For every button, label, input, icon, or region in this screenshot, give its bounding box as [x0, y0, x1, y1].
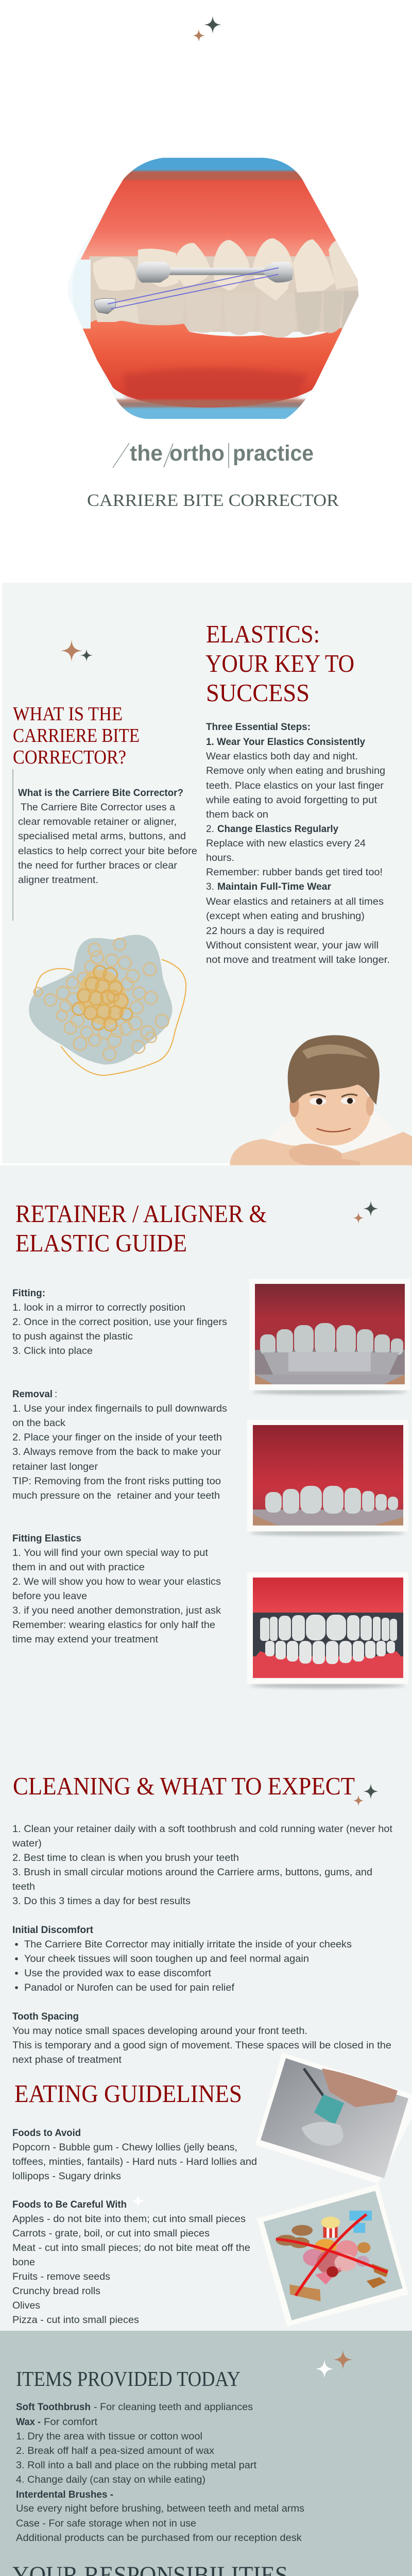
text block: cleaning steps: teeth [12, 1882, 35, 1892]
text block: three essential steps: Replace with new elastics every 24 [206, 838, 366, 849]
panel: what is the carriere bite corrector [12, 620, 412, 1165]
text block: removal: 3. Always remove from the back to make your [12, 1447, 221, 1458]
panel: retainer aligner and elastic guide [12, 1199, 410, 1688]
heading: elastics your key to success: SUCCESS [206, 679, 310, 707]
text block: removal: much pressure on the retainer and your teeth [12, 1490, 220, 1501]
logo: the/ortho|practice: practice [233, 441, 314, 466]
text block: foods to avoid: lollipops - Sugary drinks [12, 2171, 121, 2182]
hero panel [66, 16, 363, 510]
panel background: items and responsibilities [0, 2331, 412, 2576]
text block: cleaning steps: 3. Brush in small circular motions around the Carriere arms, buttons, gums, and [12, 1867, 372, 1878]
text block: initial discomfort [12, 1925, 352, 1993]
text block: foods to avoid: Popcorn - Bubble gum - Chewy lollies (jelly beans, [12, 2142, 237, 2153]
text block: fitting elastics: 3. if you need another demonstration, just ask [12, 1605, 221, 1616]
text block: three essential steps: 22 hours a day is required [206, 926, 324, 937]
text block: removal: TIP: Removing from the front risks putting too [12, 1476, 221, 1487]
text block: items list: Case - For safe storage when not in use [16, 2518, 196, 2529]
heading: elastics your key to success: YOUR KEY TO [205, 649, 354, 677]
text block: cleaning steps: 1. Clean your retainer daily with a soft toothbrush and cold running water (never hot [12, 1824, 393, 1835]
text block: tooth spacing [12, 2011, 391, 2065]
heading: what is: CORRECTOR? [13, 747, 126, 768]
text block: three essential steps: Remove only when eating and brushing [206, 766, 385, 776]
heading: retainer guide: ELASTIC GUIDE [15, 1229, 187, 1257]
icon: faint white star [131, 1611, 145, 1625]
text block: three essential steps: not move and treatment will take longer. [206, 955, 390, 965]
heading: what is: WHAT IS THE [13, 703, 123, 725]
text block: three essential steps: while eating to avoid forgetting to put [205, 795, 377, 806]
heading: eating guidelines: EATING GUIDELINES [14, 2079, 242, 2108]
text block: three essential steps: 2. [206, 824, 214, 835]
logo: the/ortho|practice: ortho [169, 441, 225, 466]
text block: items list: Additional products can be purchased from our reception desk [16, 2533, 302, 2544]
text block: definition: clear removable retainer or aligner, [18, 817, 177, 827]
text block: tooth spacing: You may notice small spaces developing around your front teeth. [12, 2026, 307, 2037]
text block: items list: For comfort [44, 2417, 98, 2428]
illustration: teeth with bite corrector [66, 155, 363, 424]
text block: initial discomfort: Panadol or Nurofen can be used for pain relief [24, 1982, 235, 1993]
text block: cleaning steps: 2. Best time to clean is when you brush your teeth [12, 1853, 239, 1863]
photo: removal [247, 1420, 408, 1536]
photo: fitting elastics [247, 1572, 408, 1688]
text block: foods to be careful with: Olives [12, 2300, 40, 2311]
text block: fitting elastics: before you leave [12, 1591, 87, 1602]
icon: faint white star [131, 2194, 145, 2208]
text block: items list: - For cleaning teeth and appliances [94, 2402, 253, 2413]
heading: items provided today: ITEMS PROVIDED TODAY [16, 2367, 241, 2391]
text block: initial discomfort: The Carriere Bite Corrector may initially irritate the inside of your cheeks [24, 1939, 352, 1950]
text block: foods to be careful with: Crunchy bread rolls [12, 2286, 100, 2297]
text block: foods to avoid: toffees, minties, fantails) - Hard nuts - Hard lollies and [12, 2157, 257, 2167]
text block: tooth spacing: Tooth Spacing [12, 2011, 79, 2022]
text block: fitting: 1. look in a mirror to correctly position [12, 1302, 185, 1313]
text block: cleaning steps: water) [12, 1838, 42, 1849]
heading: what is: CARRIERE BITE [13, 725, 140, 747]
text block: three essential steps: hours. [206, 853, 234, 863]
text block: initial discomfort: Initial Discomfort [12, 1925, 94, 1936]
text block: fitting [12, 1288, 227, 1357]
text block: removal: : [55, 1389, 57, 1400]
text block: foods to be careful with: bone [12, 2257, 35, 2268]
heading: elastics your key to success: ELASTICS: [206, 620, 320, 648]
heading: retainer guide [15, 1199, 267, 1257]
text block: fitting elastics: them in and out with practice [12, 1562, 145, 1573]
text block: items list: Interdental Brushes - [16, 2489, 113, 2500]
text block: removal: 1. Use your index fingernails to pull downwards [12, 1403, 227, 1414]
icon: sparkle stars [61, 640, 93, 662]
text block: tooth spacing: next phase of treatment [12, 2055, 122, 2065]
rule [12, 769, 13, 921]
text block: foods to be careful with [12, 2199, 250, 2326]
text block: three essential steps [205, 722, 390, 965]
text block: items list: 1. Dry the area with tissue or cotton wool [16, 2431, 202, 2442]
text block: fitting: Fitting: [12, 1288, 45, 1299]
text block: three essential steps: teeth. Place elastics on your last finger [206, 781, 384, 791]
text block: three essential steps: them back on [206, 809, 268, 820]
text block: definition: elastics to help correct your bite before [18, 846, 197, 857]
text block: removal: 2. Place your finger on the inside of your teeth [12, 1432, 222, 1443]
text block: three essential steps: 3. [206, 882, 214, 892]
text block: cleaning steps [12, 1824, 393, 1907]
icon: sparkle stars top [193, 16, 221, 42]
text block: items list: Wax - [16, 2417, 41, 2428]
text block: fitting elastics: Remember: wearing elastics for only half the [12, 1620, 215, 1631]
text block: elastics heading and steps [205, 620, 390, 965]
text block: foods to be careful with: Apples - do not bite into them; cut into small pieces [12, 2214, 246, 2225]
heading: cleaning: CLEANING & WHAT TO EXPECT [13, 1772, 355, 1800]
heading: what is [13, 703, 140, 768]
text block: initial discomfort: Your cheek tissues will soon toughen up and feel normal again [24, 1954, 309, 1964]
text block: foods to be careful with: Carrots - grate, boil, or cut into small pieces [12, 2228, 210, 2239]
text block: items list: 2. Break off half a pea-sized amount of wax [16, 2446, 215, 2456]
text block: fitting elastics: time may extend your treatment [12, 1634, 159, 1645]
text block: removal: Removal [12, 1389, 53, 1400]
text block: three essential steps: (except when eating and brushing) [206, 911, 365, 922]
panel background: guides [0, 1165, 412, 2331]
heading: retainer guide: RETAINER / ALIGNER & [15, 1199, 267, 1228]
text block: definition: specialised metal arms, buttons, and [18, 831, 186, 842]
text block: definition: the need for further braces or clear [18, 860, 178, 871]
text block: items list [16, 2402, 304, 2544]
text block: removal: on the back [12, 1418, 66, 1429]
text block: definition: aligner treatment. [18, 875, 98, 886]
elastic [108, 268, 279, 309]
text block: fitting: to push against the plastic [12, 1331, 133, 1342]
text block: fitting elastics [12, 1533, 221, 1645]
panel: cleaning and what to expect [12, 1772, 393, 2065]
text block: foods to be careful with: Meat - cut into small pieces; do not bite meat off the [12, 2243, 250, 2253]
text block: fitting: 3. Click into place [12, 1346, 93, 1357]
metal arm [169, 268, 265, 275]
page background: white hero [0, 0, 412, 583]
text block: foods to avoid [12, 2128, 257, 2182]
text block: three essential steps: Change Elastics Regularly [217, 824, 338, 835]
text block: fitting elastics: 2. We will show you how to wear your elastics [12, 1577, 221, 1587]
icon: sparkle stars [353, 1784, 379, 1806]
text block: definition [18, 788, 197, 886]
photo: fitting aligner [249, 1279, 410, 1395]
logo: the/ortho|practice [113, 441, 314, 468]
panel: eating guidelines [12, 2053, 412, 2327]
panel: items provided today [16, 2350, 353, 2544]
text block: definition: The Carriere Bite Corrector uses a [21, 802, 175, 813]
lower aligner teeth [95, 291, 358, 338]
text block: items list: 4. Change daily (can stay on while eating) [16, 2475, 205, 2485]
text block: three essential steps: Wear elastics both day and night. [206, 751, 358, 762]
text block: three essential steps: Three Essential Steps: [206, 722, 311, 733]
text block: three essential steps: 1. Wear Your Elastics Consistently [206, 737, 365, 748]
text block: removal [12, 1389, 227, 1501]
photo: toothbrush cleaning aligner [255, 2053, 412, 2184]
panel background: what is / elastics [2, 583, 412, 1163]
text block: items list: Use every night before brushing, between teeth and metal arms [16, 2503, 304, 2514]
text block: removal: retainer last longer [12, 1462, 98, 1472]
heading: elastics your key to success [205, 620, 354, 707]
text block: foods to avoid: Foods to Avoid [12, 2128, 81, 2139]
text block: items list: Soft Toothbrush [16, 2402, 91, 2413]
text block: foods to be careful with: Fruits - remove seeds [12, 2272, 110, 2282]
text block: tooth spacing: This is temporary and a good sign of movement. These spaces will be closed in the [12, 2040, 391, 2051]
upper teeth [93, 238, 358, 301]
text block: initial discomfort: Use the provided wax to ease discomfort [24, 1968, 212, 1979]
text block: fitting: 2. Once in the correct position, use your fingers [12, 1317, 227, 1328]
logo: the/ortho|practice: the [130, 441, 163, 466]
text block: foods to be careful with: Pizza - cut into small pieces [12, 2315, 139, 2326]
text block: three essential steps: Without consistent wear, your jaw will [206, 940, 379, 951]
image: smiling boy [230, 1035, 412, 1165]
text block: three essential steps: Maintain Full-Time Wear [217, 882, 332, 892]
text block: foods to be careful with: Foods to Be Careful With [12, 2199, 127, 2210]
text block: three essential steps: Remember: rubber bands get tired too! [206, 867, 383, 878]
text block: fitting elastics: 1. You will find your own special way to put [12, 1548, 209, 1558]
text block: items list: 3. Roll into a ball and place on the rubbing metal part [16, 2460, 257, 2471]
text block: three essential steps: Wear elastics and retainers at all times [206, 896, 384, 907]
text block: definition: What is the Carriere Bite Corrector? [18, 788, 183, 799]
icon: sparkle stars [315, 2350, 353, 2378]
image: pile of elastics on blob [29, 935, 186, 1075]
text block: fitting elastics: Fitting Elastics [12, 1533, 81, 1544]
text block: cleaning steps: 3. Do this 3 times a day for best results [12, 1896, 191, 1907]
title: carriere bite corrector: CARRIERE BITE CORRECTOR [87, 491, 339, 510]
photo: foods to avoid crossed out [256, 2184, 408, 2327]
icon: sparkle stars [353, 1201, 379, 1224]
